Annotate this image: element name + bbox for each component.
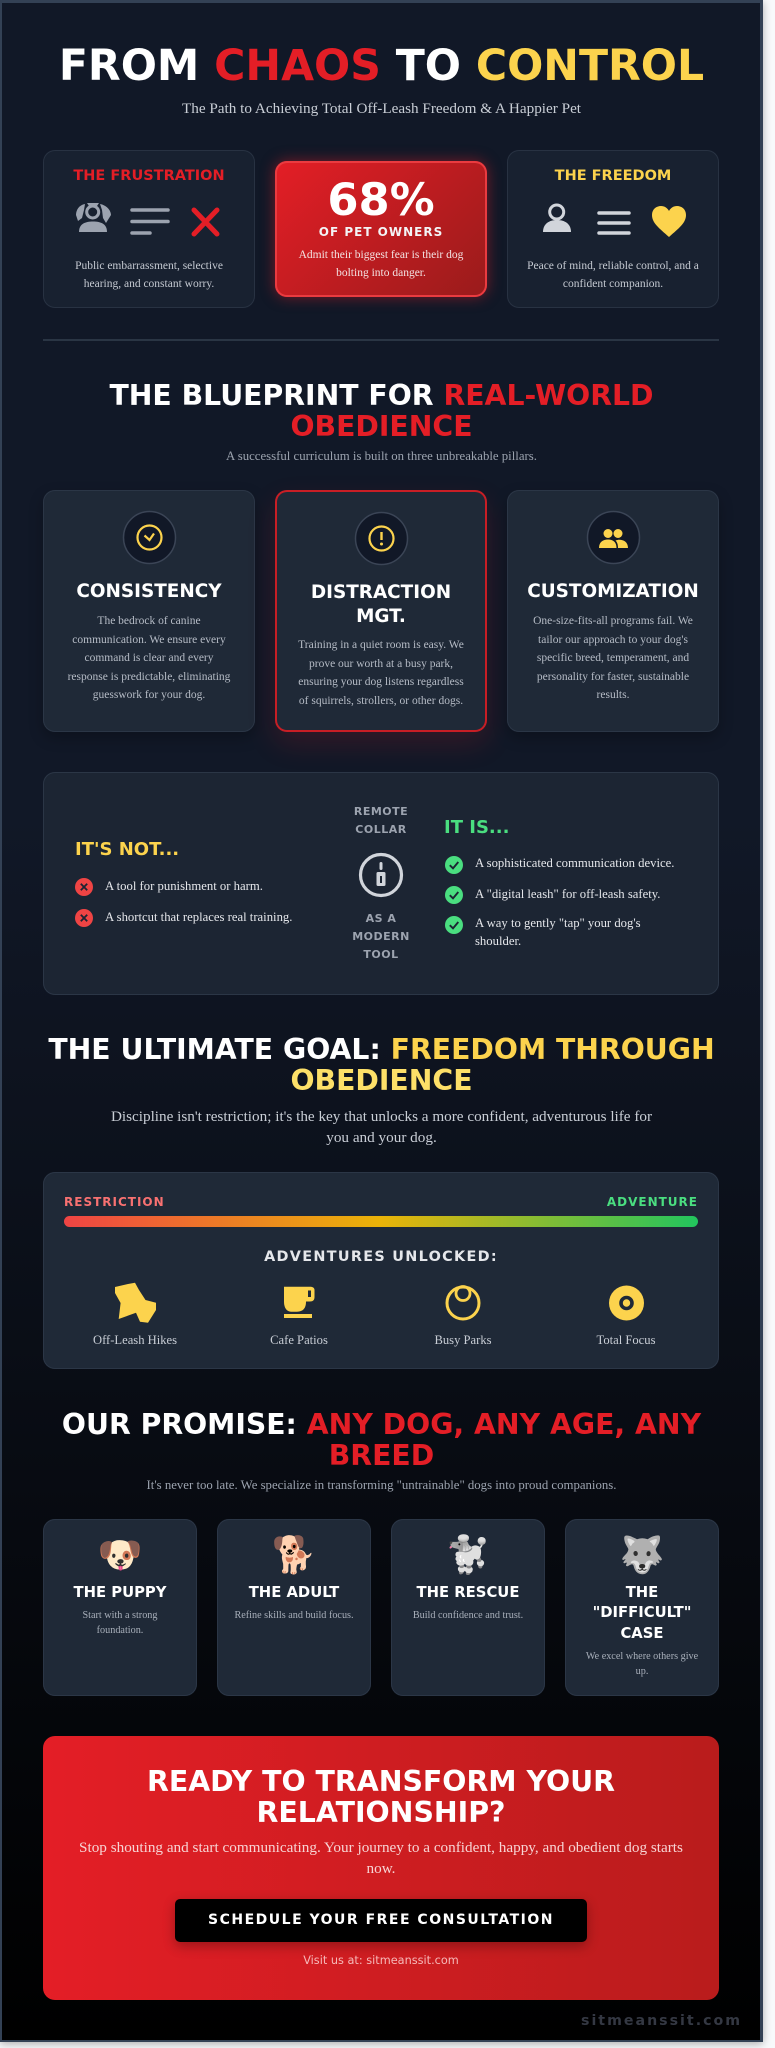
text: consistency body: The bedrock of canine (97, 615, 201, 627)
item: off-leash hikes (93, 1282, 177, 1347)
heading: ultimate goal (48, 1033, 715, 1097)
icon: poodle emoji: 🐩 (446, 1534, 490, 1576)
heading: THE RESCUE (417, 1584, 519, 1601)
icon: check (445, 856, 463, 874)
center label: as a modern tool: MODERN (352, 930, 410, 943)
label: Busy Parks (434, 1333, 492, 1347)
text: distraction body: prove our worth at a busy park, (309, 658, 453, 670)
center label: as a modern tool: AS A (366, 912, 396, 925)
icon: focus target (609, 1286, 644, 1320)
text (565, 1649, 719, 1679)
label: Off-Leash Hikes (93, 1333, 177, 1347)
text: frustration body: hearing, and constant worry. (84, 278, 214, 290)
label: Total Focus (597, 1333, 655, 1347)
panel: remote collar (43, 772, 719, 995)
stat description: Admit their biggest fear is their dog (299, 249, 463, 261)
gradient bar (64, 1216, 698, 1227)
center label: as a modern tool (352, 912, 410, 961)
text: A way to gently "tap" your dog's (475, 916, 641, 930)
center label: remote collar: COLLAR (355, 823, 407, 836)
text: customization body: personality for faster, sustainable (537, 671, 689, 683)
icon: wolf emoji: 🐺 (620, 1534, 664, 1576)
icon: hike (115, 1282, 156, 1323)
text: freedom body: confident companion. (563, 278, 663, 290)
text: customization body (533, 615, 693, 701)
text: A "digital leash" for off-leash safety. (475, 887, 660, 901)
button: schedule consultation: SCHEDULE YOUR FREE CONSULTATION (208, 1912, 554, 1928)
subheading: ultimate goal: you and your dog. (326, 1128, 437, 1146)
text: customization body: One-size-fits-all programs fail. We (533, 615, 693, 627)
panel: adventure spectrum (43, 1172, 719, 1369)
center label: remote collar: REMOTE (354, 805, 408, 818)
text: A sophisticated communication device. (475, 856, 674, 870)
text: consistency body: guesswork for your dog. (93, 689, 205, 701)
heading: it is: IT IS... (444, 817, 509, 838)
stat number: 68% (327, 173, 435, 226)
text: cta: now. (367, 1860, 395, 1876)
list item: shortcut (75, 909, 292, 927)
heading: blueprint: OBEDIENCE (290, 410, 473, 443)
icon: puppy emoji: 🐶 (98, 1534, 142, 1576)
text: cta: Stop shouting and start communicating. Your journey to a confident, happy, and obedient dog starts (79, 1839, 683, 1856)
title: FROM CHAOS TO CONTROL (59, 41, 704, 91)
icon: cross (75, 909, 93, 927)
heading: THE PUPPY (73, 1584, 166, 1601)
button: schedule consultation (175, 1899, 587, 1942)
icon: freedom row (543, 204, 686, 237)
list item: communication (445, 856, 674, 874)
center label: as a modern tool: TOOL (363, 948, 399, 961)
item: total focus (596, 1286, 656, 1347)
panel: distraction management (275, 490, 487, 732)
text (82, 1610, 158, 1636)
text: A shortcut that replaces real training. (105, 910, 292, 924)
text: consistency body: response is predictable, eliminating (68, 671, 230, 683)
icon: clock (122, 510, 176, 564)
stat description: bolting into danger. (336, 267, 426, 279)
text: We excel where others give (586, 1651, 698, 1662)
text: customization body: specific breed, temperament, and (537, 652, 689, 664)
label: adventure: ADVENTURE (607, 1195, 698, 1209)
text: freedom body: Peace of mind, reliable control, and a (527, 260, 699, 272)
text: distraction body: of squirrels, strollers, or other dogs. (299, 695, 463, 707)
heading: distraction mgt (311, 582, 451, 626)
subheading: ultimate goal (111, 1108, 652, 1146)
heading: ultimate goal: THE ULTIMATE GOAL: FREEDOM THROUGH (48, 1033, 715, 1066)
icon: check (445, 886, 463, 904)
text: A tool for punishment or harm. (105, 879, 263, 893)
panel: the freedom (507, 150, 719, 308)
icon: park (446, 1285, 480, 1320)
heading: blueprint (109, 379, 654, 443)
text: Start with a strong (82, 1610, 157, 1621)
text: distraction body: ensuring your dog listens regardless (298, 676, 464, 688)
text: consistency body: command is clear and every (84, 652, 214, 664)
icon: dog emoji: 🐕 (272, 1534, 316, 1576)
subtitle: The Path to Achieving Total Off-Leash Freedom & A Happier Pet (182, 100, 581, 117)
panel: customization (507, 490, 719, 732)
heading: customization: CUSTOMIZATION (527, 581, 699, 602)
heading: adventures unlocked: ADVENTURES UNLOCKED: (264, 1249, 498, 1265)
stat label: OF PET OWNERS (319, 225, 443, 239)
icon: cross (75, 878, 93, 896)
subheading: ultimate goal: Discipline isn't restriction; it's the key that unlocks a more confident, adventurous life for (111, 1108, 652, 1125)
text: consistency body (68, 615, 230, 701)
panel: call to action (43, 1736, 719, 2000)
subheading: blueprint: A successful curriculum is built on three unbreakable pillars. (226, 449, 537, 463)
heading: the freedom: THE FREEDOM (555, 168, 671, 184)
text: up. (636, 1666, 648, 1677)
text: Build confidence and trust. (413, 1610, 523, 1621)
heading (565, 1583, 719, 1644)
text: foundation. (97, 1625, 143, 1636)
label: Cafe Patios (270, 1333, 328, 1347)
heading: cta (43, 1767, 719, 1828)
icon: people (586, 510, 640, 564)
list item: punishment (75, 878, 263, 896)
heading: the frustration: THE FRUSTRATION (73, 168, 225, 184)
heading: distraction mgt: DISTRACTION (311, 582, 451, 603)
panel: the difficult case (565, 1519, 719, 1696)
text: website: Visit us at: sitmeanssit.com (303, 1954, 459, 1967)
text: cta (43, 1838, 719, 1879)
icon: alert (354, 512, 408, 566)
text: customization body: results. (597, 689, 629, 701)
heading: our promise: BREED (329, 1439, 434, 1472)
panel: the puppy (43, 1519, 197, 1696)
list item: gentle tap (445, 916, 641, 948)
subheading: our promise: It's never too late. We specialize in transforming "untrainable" dogs into proud companions. (147, 1478, 616, 1492)
label: restriction: RESTRICTION (64, 1195, 165, 1209)
icon: remote collar (358, 852, 404, 898)
heading: it's not: IT'S NOT... (75, 839, 179, 860)
heading: consistency: CONSISTENCY (76, 581, 222, 602)
text: customization body: tailor our approach to your dog's (538, 634, 688, 646)
text: freedom body (527, 260, 699, 290)
icon: frustration row (76, 203, 220, 236)
text: consistency body: communication. We ensure every (72, 634, 226, 646)
heading: ultimate goal: OBEDIENCE (290, 1064, 473, 1097)
heading: distraction mgt: MGT. (356, 606, 406, 626)
text (475, 916, 641, 948)
heading: THE ADULT (249, 1584, 339, 1601)
list item: digital leash (445, 886, 660, 904)
heading: our promise (62, 1408, 702, 1472)
heading: CASE (620, 1625, 664, 1642)
watermark: sitmeanssit.com (581, 2013, 742, 2029)
panel: 68% stat (275, 161, 487, 297)
icon: check (445, 916, 463, 934)
text: Refine skills and build focus. (234, 1610, 354, 1621)
stat description (298, 249, 464, 279)
panel: the rescue (391, 1519, 545, 1696)
heading: cta: RELATIONSHIP? (256, 1796, 506, 1828)
text: distraction body: Training in a quiet room is easy. We (298, 639, 464, 651)
panel: the frustration (43, 150, 255, 308)
icon: coffee cup (284, 1286, 314, 1318)
text: shoulder. (475, 934, 521, 948)
heading: THE (626, 1584, 658, 1601)
heading: cta: READY TO TRANSFORM YOUR (147, 1765, 615, 1798)
panel: consistency (43, 490, 255, 732)
center label: remote collar (354, 805, 408, 836)
heading: "DIFFICULT" (593, 1604, 691, 1621)
panel: the adult (217, 1519, 371, 1696)
text: frustration body (75, 260, 223, 290)
heading: our promise: OUR PROMISE: ANY DOG, ANY AGE, ANY (62, 1408, 701, 1441)
item: busy parks (434, 1285, 492, 1347)
text: distraction body (298, 639, 464, 707)
divider (43, 339, 719, 341)
heading: blueprint: THE BLUEPRINT FOR REAL-WORLD (109, 379, 654, 412)
item: cafe patios (270, 1286, 328, 1347)
text: frustration body: Public embarrassment, selective (75, 260, 223, 272)
